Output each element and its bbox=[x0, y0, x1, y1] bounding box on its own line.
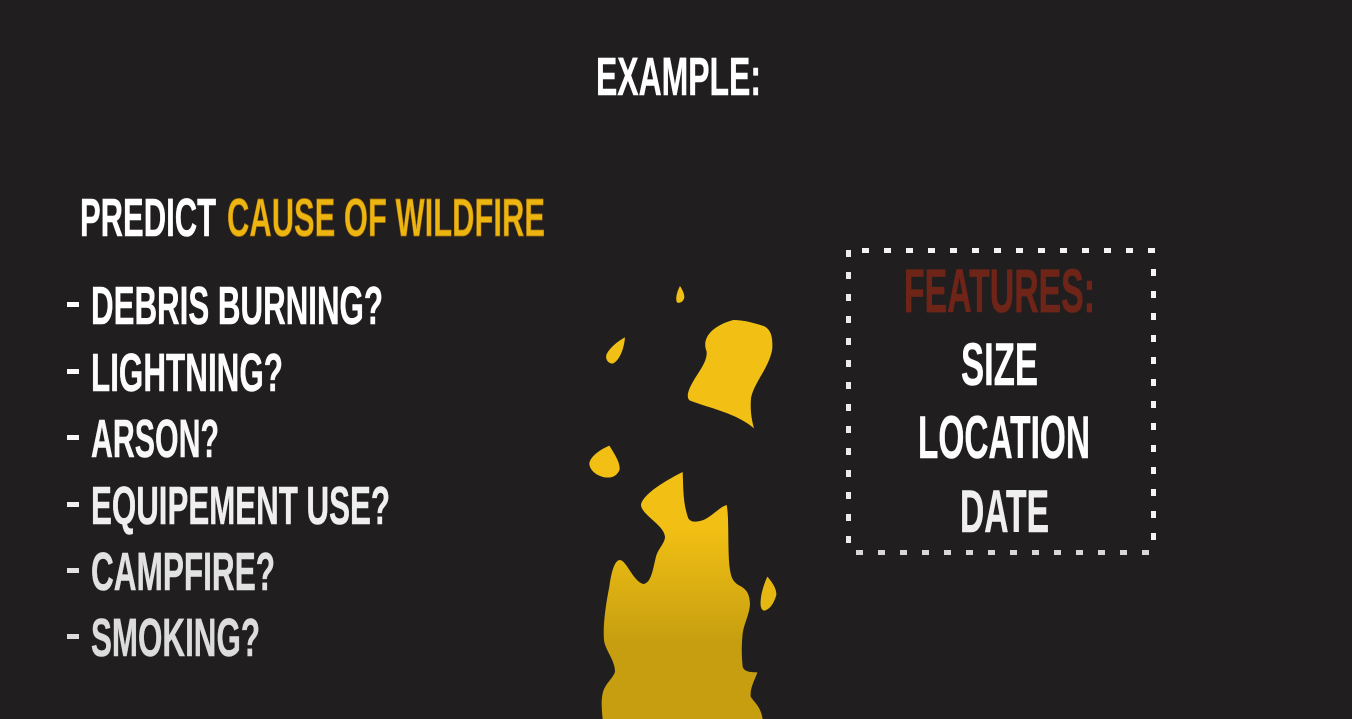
list item: smoking bbox=[67, 608, 260, 668]
list item: arson bbox=[67, 409, 219, 469]
list item: campfire: CAMPFIRE? bbox=[91, 542, 275, 602]
flame body bbox=[602, 472, 763, 719]
list item: equipment use bbox=[67, 476, 390, 536]
title: EXAMPLE: bbox=[596, 47, 761, 107]
dotted border bbox=[846, 248, 1156, 555]
icon: flame bbox=[589, 286, 776, 719]
list item: equipment use: EQUIPEMENT USE? bbox=[91, 476, 390, 536]
list item: lightning bbox=[67, 343, 283, 403]
feature: date: DATE bbox=[960, 478, 1049, 545]
list item: campfire bbox=[67, 542, 275, 602]
flame piece: upper blob bbox=[688, 320, 772, 428]
list item: smoking: SMOKING? bbox=[91, 608, 260, 668]
heading: predict cause of wildfire bbox=[80, 188, 545, 248]
features heading: FEATURES: bbox=[904, 257, 1095, 325]
feature: size: SIZE bbox=[961, 331, 1038, 398]
heading: predict cause of wildfire: PREDICT bbox=[80, 188, 216, 248]
feature: location: LOCATION bbox=[918, 404, 1090, 471]
heading: predict cause of wildfire: CAUSE OF WILDFIRE bbox=[227, 188, 545, 248]
list item: lightning: LIGHTNING? bbox=[91, 343, 283, 403]
flame spark: left bbox=[606, 337, 625, 364]
list item: arson: ARSON? bbox=[91, 409, 219, 469]
flame spark: right bbox=[761, 577, 776, 611]
list item: debris burning bbox=[67, 276, 383, 336]
list item: debris burning: DEBRIS BURNING? bbox=[91, 276, 383, 336]
flame spark: lower left bbox=[589, 446, 620, 478]
list of possible causes bbox=[67, 276, 390, 668]
features box bbox=[846, 248, 1156, 555]
flame spark: top bbox=[676, 286, 684, 303]
